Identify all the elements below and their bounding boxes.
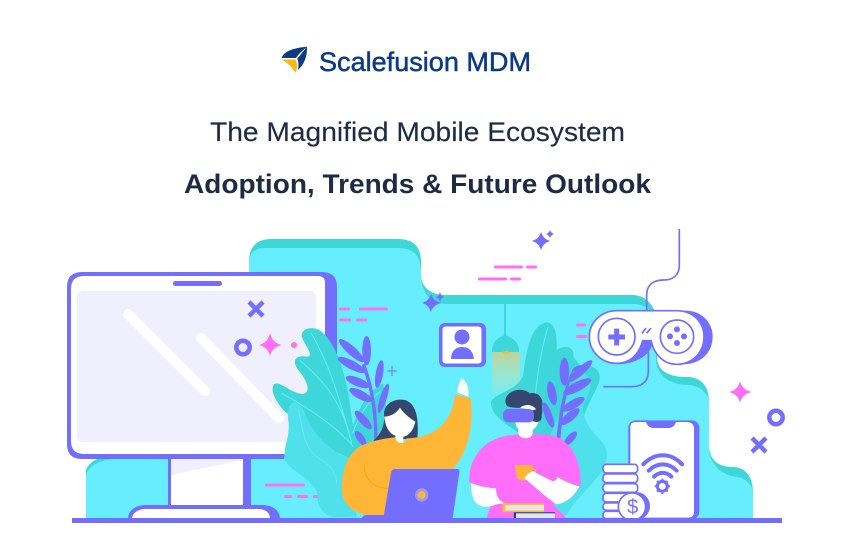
books [502, 503, 555, 518]
back foliage [491, 322, 607, 518]
woman with laptop [342, 378, 472, 518]
icon: gear [655, 479, 670, 494]
pink dashes [265, 266, 587, 498]
coin stack [603, 464, 650, 520]
sparkles [387, 230, 554, 376]
monitor [67, 272, 337, 519]
right plant [540, 358, 595, 447]
mug [515, 465, 535, 480]
man with VR headset [469, 390, 581, 518]
icon: wifi [643, 455, 682, 477]
floor line [72, 518, 782, 523]
game controller [589, 229, 713, 387]
decorative shapes on monitor [236, 302, 297, 356]
profile card icon [439, 323, 486, 367]
logo wordmark: Scalefusion MDM [319, 47, 531, 77]
logo [281, 47, 531, 77]
right side decorations [729, 381, 783, 452]
subtitle: Adoption, Trends & Future Outlook [184, 169, 652, 199]
phone with wifi [628, 420, 699, 519]
left plant [336, 336, 391, 448]
raised arm sleeve [524, 471, 579, 504]
icon: logo arrow [281, 47, 307, 73]
title line: The Magnified Mobile Ecosystem [210, 117, 625, 147]
illustration background blob [86, 239, 753, 519]
laptop [362, 469, 459, 518]
left foliage [273, 328, 390, 517]
lamp [492, 304, 520, 395]
dollar sign: $ [627, 496, 638, 518]
